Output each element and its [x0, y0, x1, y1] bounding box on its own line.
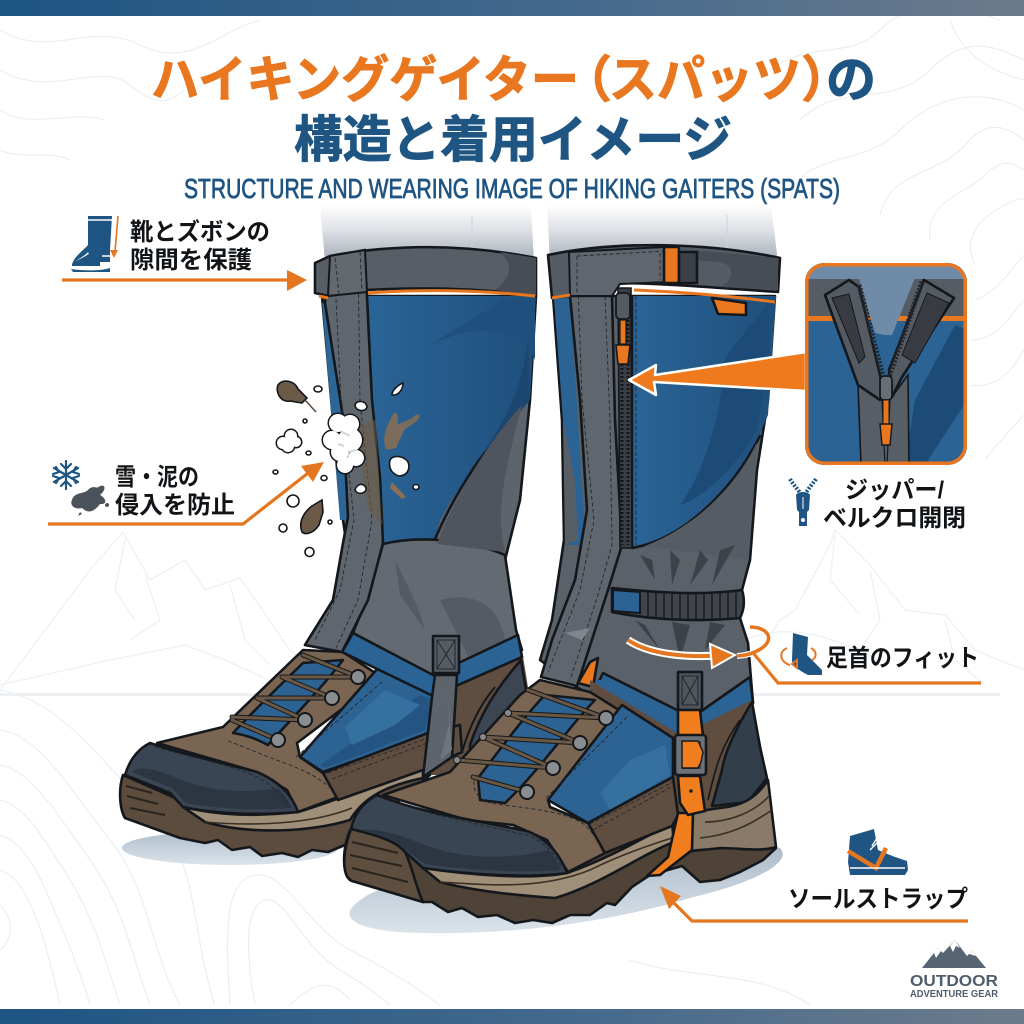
title: （: [562, 52, 612, 108]
left gaiter cuff: [315, 247, 536, 296]
bottom bar: [0, 1009, 1024, 1024]
background mountains: [0, 530, 1024, 696]
label: protect gap between boot and trousers: [62, 216, 307, 291]
trouser legs: [320, 205, 778, 262]
right gaiter side sliver lower fill: [590, 680, 610, 690]
right boot toe cap: [351, 795, 567, 875]
label: zipper / velcro opening: ジッパー/: [845, 477, 944, 504]
icon: logo mountains: [922, 940, 986, 968]
right boot heel counter: [712, 702, 767, 806]
snow and mud splash: [273, 381, 420, 556]
icon: zipper: [790, 479, 816, 526]
right gaiter: [540, 245, 780, 738]
left boot lower panel: [323, 725, 462, 800]
zipper callout arrow: [629, 352, 806, 395]
logo: [910, 940, 999, 1000]
right boot outsole: [344, 815, 776, 923]
right boot lower panel: [588, 777, 678, 853]
left gaiter body: [305, 296, 536, 695]
label: prevents snow and mud: [48, 461, 324, 524]
label: ankle fit: 足首のフィット: [826, 645, 979, 672]
strap upper segment: [678, 710, 703, 736]
label: prevents snow and mud: 雪・泥の: [115, 464, 199, 491]
strap lower loop: [647, 813, 693, 876]
right gaiter front strip: [541, 250, 622, 686]
inset: left flap: [825, 280, 885, 400]
title: [151, 52, 876, 168]
small snow clump: [277, 430, 301, 452]
callout line: [754, 654, 981, 683]
right gaiter gathered ankle: [635, 545, 735, 660]
left boot mesh panel: [300, 668, 433, 772]
title: の: [826, 52, 876, 108]
label: sole strap: [660, 829, 968, 921]
left boot tongue: [233, 660, 343, 745]
inset: lower grey front: [858, 375, 909, 465]
title: スパッツ: [609, 52, 801, 108]
arrow: to sole strap: [660, 886, 968, 921]
left boot midsole: [183, 770, 423, 830]
title: ）: [801, 52, 851, 108]
right boot laces: [454, 690, 613, 799]
inset: right flap: [889, 280, 954, 397]
right boot toe sole bumper: [344, 829, 423, 902]
arrow: to splash: [48, 462, 324, 524]
right gaiter main blue panel: [633, 296, 776, 548]
left boot rear heel: [380, 650, 530, 775]
left boot laces: [232, 655, 365, 747]
right gaiter hem band: [595, 673, 753, 738]
right gaiter orange trim: [634, 290, 775, 302]
label: ankle fit: [628, 627, 981, 683]
right boot tongue: [478, 695, 595, 803]
left gaiter hem band: [342, 633, 522, 696]
big snow clump: [323, 414, 364, 473]
right gaiter zipper slider and pull: [616, 293, 630, 364]
label: sole strap: ソールストラップ: [788, 886, 968, 913]
left gaiter: [305, 247, 536, 777]
inset: opening showing trouser: [859, 279, 914, 335]
left boot: [120, 650, 530, 857]
right gaiter left blue sliver: [554, 298, 586, 545]
strap tongue end: [678, 776, 705, 815]
label: protect gap between boot and trousers: 靴とズボンの: [130, 218, 270, 246]
icon: tall boot: [71, 216, 118, 272]
title: ハイキングゲイター: [151, 52, 579, 108]
label: zipper / velcro opening: ベルクロ開閉: [823, 505, 966, 532]
left gaiter orange trim: [368, 291, 535, 296]
left gaiter front strip: [305, 250, 383, 652]
right boot heel fill: [590, 680, 770, 830]
inset: slider and pull: [880, 376, 892, 400]
top bar: [0, 0, 1024, 16]
left gaiter side sliver: [322, 303, 348, 520]
arrow: around ankle: [628, 627, 769, 668]
icon: boot with strap: [848, 829, 908, 875]
mud clods: [277, 381, 307, 403]
orange sole strap and buckle: [647, 672, 706, 876]
left gaiter grey lower panel: [353, 540, 522, 680]
right gaiter orange label patch: [712, 298, 746, 315]
right gaiter zipper: [618, 288, 632, 548]
right gaiter velcro tabs: [664, 247, 697, 283]
logo: ADVENTURE GEAR: [910, 989, 999, 1000]
right gaiter lower orange pull tab: [578, 658, 598, 687]
right gaiter body: [540, 296, 775, 738]
left boot outsole: [120, 775, 430, 857]
arrow: to cuff: [62, 270, 307, 291]
snow on gaiter: [287, 383, 419, 507]
label: prevents snow and mud: 侵入を防止: [115, 492, 235, 519]
shoe shadows: [122, 831, 783, 933]
right boot mesh panel: [548, 705, 673, 823]
strap grey webbing tab: [678, 672, 702, 710]
left boot toe cap: [125, 743, 298, 814]
right boot: [344, 680, 776, 923]
right boot vamp: [383, 680, 630, 872]
icon: foot with rotation arrows: [781, 633, 822, 675]
panel: zipper close-up inset: [805, 263, 967, 465]
label: zipper / velcro opening: [790, 477, 966, 532]
right boot heel rand: [672, 780, 776, 852]
icon: mud splat: [71, 486, 109, 516]
label: protect gap between boot and trousers: 隙間を保護: [130, 247, 252, 274]
title: 構造と着用イメージ: [294, 112, 732, 168]
left gaiter blue panel: [367, 296, 536, 546]
icon: snowflake: [53, 461, 79, 489]
buckle: [675, 735, 706, 775]
right boot midsole: [423, 823, 674, 898]
right gaiter cuff: [548, 245, 780, 298]
logo: OUTDOOR: [910, 973, 998, 990]
left boot vamp: [157, 650, 383, 812]
inset: zipper teeth: [859, 282, 922, 380]
left gaiter tab and under strap: [423, 675, 457, 777]
